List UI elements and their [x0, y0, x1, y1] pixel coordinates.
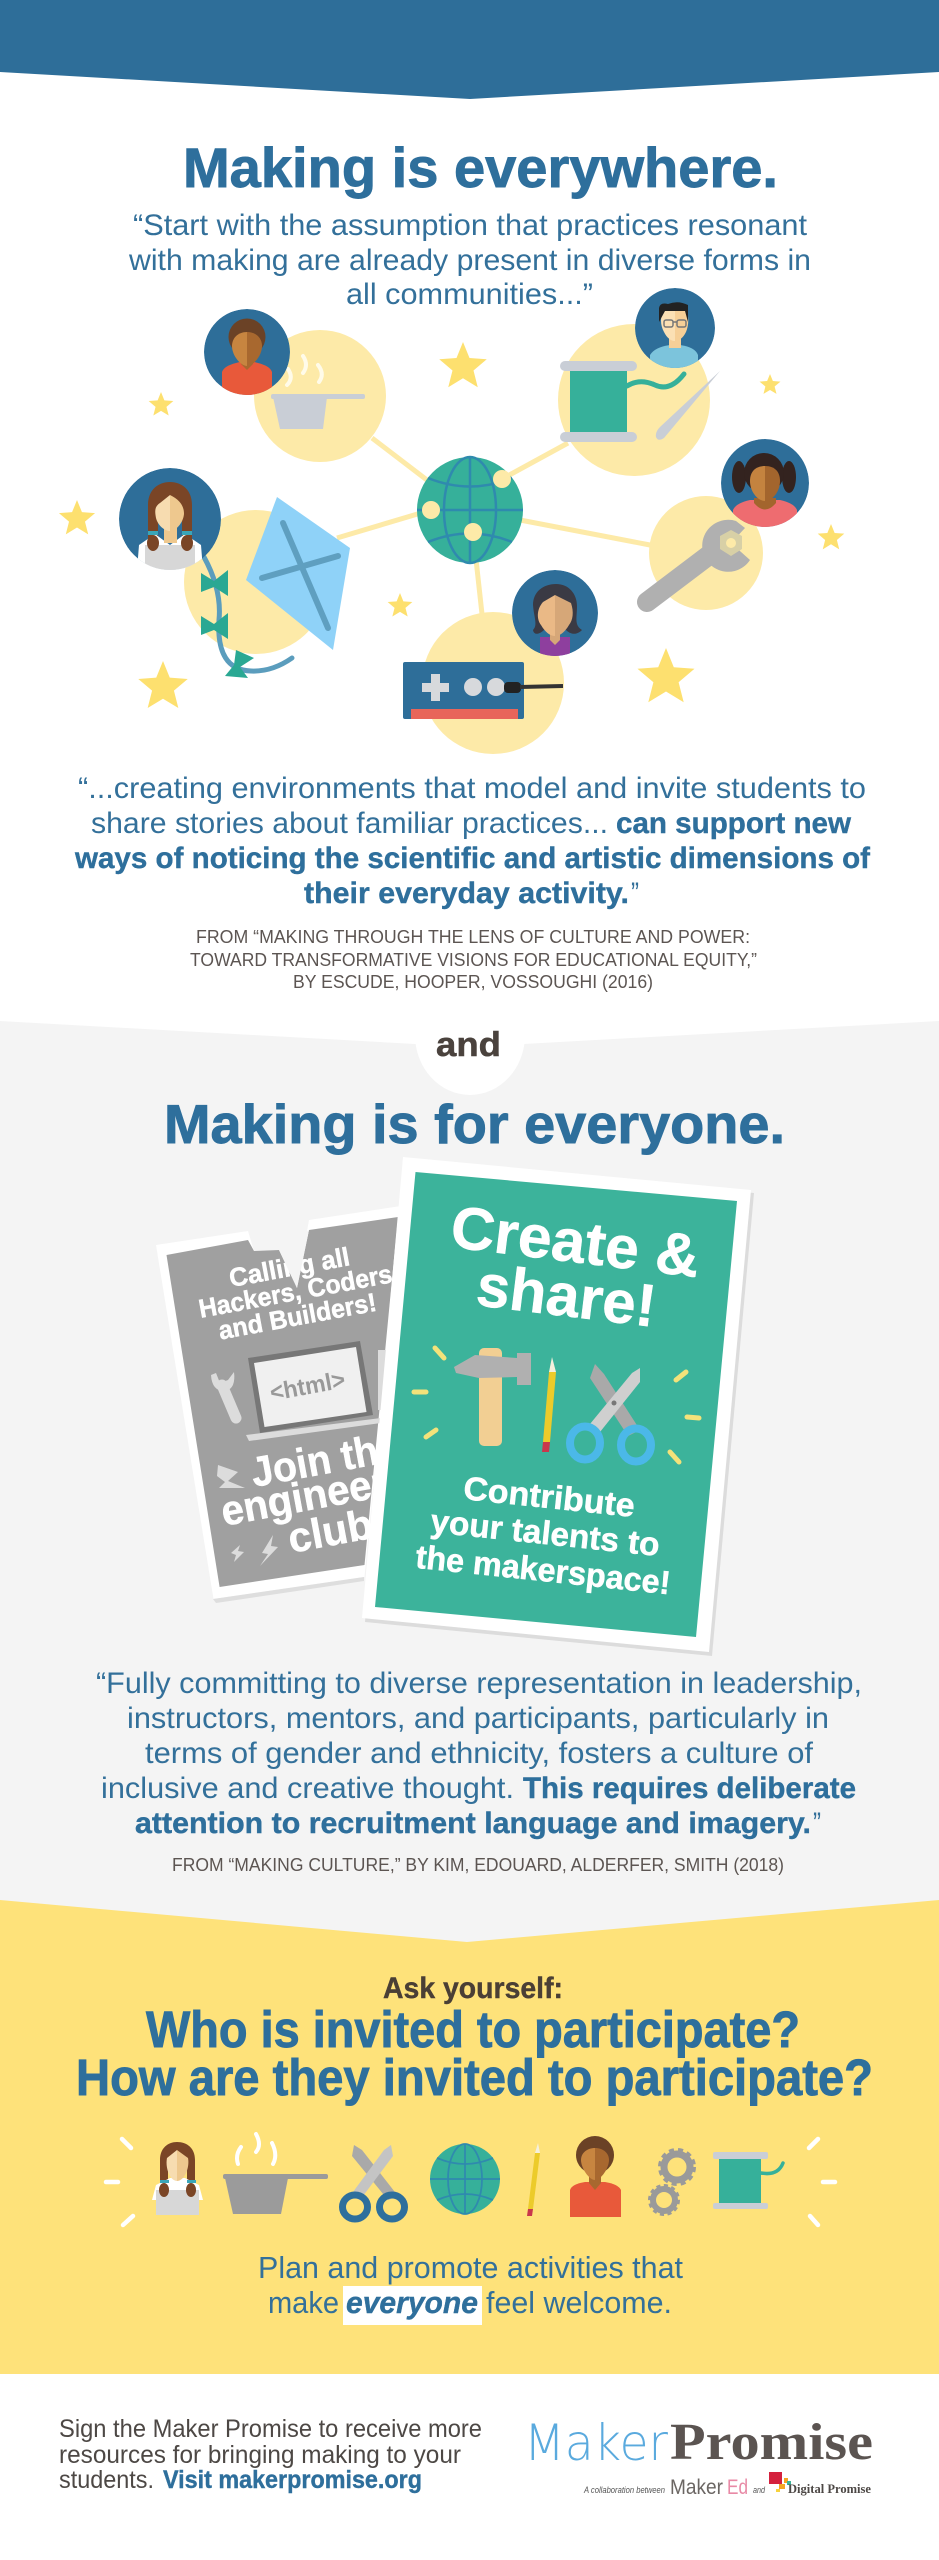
icon: hammer: [454, 1348, 531, 1446]
quote: creating environments: [74, 772, 871, 910]
quote: start with the assumption: with making are already present in diverse forms in: [128, 244, 811, 277]
sparks: [414, 1348, 699, 1462]
poster: exclusive grey flyer: Join the: [247, 1422, 403, 1496]
avatar: girl with braids: [119, 468, 221, 573]
quote: fully committing: “Fully committing to diverse representation in leadership,: [96, 1667, 862, 1700]
heading: who and how are invited: How are they invited to participate?: [76, 2049, 873, 2106]
heading: who and how are invited: [76, 2001, 873, 2106]
icon: spool and needle: [560, 361, 720, 442]
poster: exclusive grey flyer: Calling all: [227, 1241, 352, 1293]
logo: maker promise: A collaboration between: [583, 2485, 665, 2495]
quote: fully committing: [96, 1667, 862, 1840]
quote: creating environments: their everyday activity.: [304, 877, 629, 910]
avatar: man with glasses: [635, 288, 715, 368]
panel: making is for everyone background: [0, 1021, 939, 1960]
poster: exclusive grey flyer: Hackers, Coders: [196, 1259, 394, 1324]
heading: who and how are invited: Who is invited to participate?: [146, 2001, 800, 2058]
quote: creating environments: ways of noticing the scientific and artistic dimensions of: [74, 842, 871, 875]
poster: exclusive grey flyer: and Builders!: [216, 1287, 379, 1345]
icon: gears: [650, 2150, 694, 2214]
logo: maker promise: [524, 2414, 873, 2499]
connector: and: and: [436, 1026, 501, 1064]
icon: scissors: [570, 1364, 651, 1462]
avatar: person in red shirt: [204, 309, 290, 395]
footer: sign the maker promise: students.: [59, 2466, 154, 2494]
poster: exclusive grey flyer: club: [284, 1500, 376, 1562]
callout: plan and promote: feel welcome.: [486, 2285, 672, 2320]
quote: fully committing: ”: [813, 1807, 821, 1840]
icon: spool: [713, 2152, 783, 2209]
citation: escude, hooper, vossoughi: FROM “MAKING THROUGH THE LENS OF CULTURE AND POWER:: [196, 927, 750, 947]
citation: kim, edouard, alderfer, smith: FROM “MAKING CULTURE,” BY KIM, EDOUARD, ALDERFER, SMITH (2018): [172, 1855, 784, 1875]
icon row: [106, 2134, 835, 2225]
callout: plan and promote: [258, 2250, 683, 2325]
icon: globe: [430, 2144, 500, 2214]
panel: ask yourself background: [0, 1900, 939, 2374]
icon: pencil: [542, 1357, 556, 1452]
connector: and: [415, 1026, 525, 1095]
citation: escude, hooper, vossoughi: [190, 927, 757, 992]
poster: welcoming green flyer: Create &: [447, 1193, 704, 1290]
top banner: [0, 0, 939, 99]
icon: wrench: [647, 520, 750, 602]
quote: fully committing: instructors, mentors, and participants, particularly in: [127, 1702, 829, 1735]
icon: pencil: [527, 2143, 540, 2216]
icon: wrench and gear: [211, 1350, 388, 1418]
icon: laptop: [246, 1341, 381, 1441]
quote: start with the assumption: all communities...”: [346, 278, 593, 311]
poster: welcoming green flyer: Contribute: [462, 1469, 637, 1524]
quote: creating environments: ”: [631, 877, 639, 910]
quote: start with the assumption: “Start with the assumption that practices resonant: [133, 209, 808, 242]
quote: fully committing: inclusive and creative thought.: [101, 1772, 514, 1805]
quote: fully committing: terms of gender and ethnicity, fosters a culture of: [145, 1737, 814, 1770]
icon: person: [570, 2136, 621, 2217]
quote: fully committing: attention to recruitment language and imagery.: [135, 1807, 811, 1840]
poster: exclusive grey flyer: engineers: [217, 1454, 412, 1535]
quote: creating environments: “...creating environments that model and invite students to: [78, 772, 866, 805]
connector lines: [337, 438, 650, 614]
citation: escude, hooper, vossoughi: TOWARD TRANSFORMATIVE VISIONS FOR EDUCATIONAL EQUITY,”: [190, 950, 757, 970]
logo: maker promise: Promise: [670, 2414, 873, 2471]
icon: kite: [201, 497, 350, 678]
callout: plan and promote: make: [268, 2285, 339, 2320]
icon: circuit board: [403, 662, 563, 719]
logo: maker promise: Digital Promise: [788, 2481, 871, 2496]
icon: lightning bolts: [217, 1465, 278, 1566]
icon: laptop: <html>: [268, 1366, 347, 1407]
logo: maker promise: Maker: [524, 2414, 668, 2472]
avatar: girl with pigtails: [721, 439, 809, 527]
poster: welcoming green flyer: share!: [473, 1251, 660, 1340]
icon: scissors: [342, 2145, 404, 2219]
footer: sign the maker promise: Sign the Maker Promise to receive more: [59, 2415, 482, 2443]
heading: ask yourself: Ask yourself:: [383, 1972, 563, 2005]
quote: creating environments: share stories about familiar practices...: [91, 807, 608, 840]
network illustration: [59, 288, 844, 754]
citation: escude, hooper, vossoughi: BY ESCUDE, HOOPER, VOSSOUGHI (2016): [293, 972, 653, 992]
heading: making is everywhere: Making is everywhere.: [183, 136, 778, 199]
footer: sign the maker promise: Visit makerpromise.org: [163, 2466, 422, 2494]
white sparks: [106, 2139, 835, 2225]
poster: welcoming green flyer: [362, 1157, 754, 1656]
stars: [59, 342, 844, 708]
icon: cooking pot: [271, 356, 365, 429]
quote: creating environments: can support new: [616, 807, 852, 840]
heading: making is for everyone: Making is for everyone.: [164, 1093, 785, 1155]
poster: welcoming green flyer: the makerspace!: [414, 1538, 672, 1601]
icon: globe: [417, 457, 523, 563]
logo: maker promise: Maker: [670, 2476, 723, 2499]
poster: welcoming green flyer: your talents to: [429, 1502, 662, 1563]
icon: pot: [223, 2134, 328, 2214]
avatar: woman with dark hair: [512, 570, 598, 657]
footer: sign the maker promise: [59, 2415, 482, 2494]
activity circles: [184, 324, 763, 754]
quote: start with the assumption: [128, 209, 811, 311]
footer: sign the maker promise: resources for bringing making to your: [59, 2441, 461, 2469]
icon: girl: [152, 2142, 203, 2215]
poster: exclusive grey flyer: [156, 1206, 412, 1603]
logo: maker promise: and: [753, 2485, 766, 2495]
logo: maker promise: Ed: [727, 2476, 748, 2499]
callout: plan and promote: Plan and promote activities that: [258, 2250, 683, 2285]
quote: fully committing: This requires deliberate: [523, 1772, 856, 1805]
callout: plan and promote: everyone: [346, 2285, 478, 2320]
